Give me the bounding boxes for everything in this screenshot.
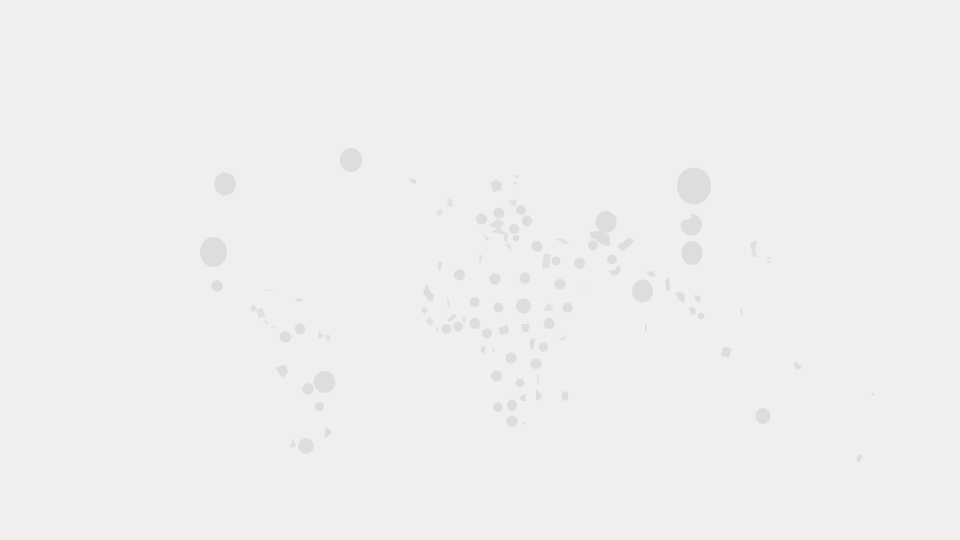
- bubbles: Southern Africa: [491, 370, 568, 426]
- bubbles: Central and East Africa: [481, 298, 572, 369]
- bubbles: North America: [200, 148, 416, 328]
- bubbles: Oceania: [728, 347, 874, 463]
- bubbles: West Africa: [421, 284, 504, 334]
- bubbles: Middle East and North Africa: [454, 238, 585, 290]
- bubbles: Central and South Asia: [588, 168, 711, 331]
- bubbles: Europe: [436, 174, 532, 271]
- bubbles: Southeast and East Asia: [675, 241, 773, 358]
- bubbles: South America: [276, 324, 335, 454]
